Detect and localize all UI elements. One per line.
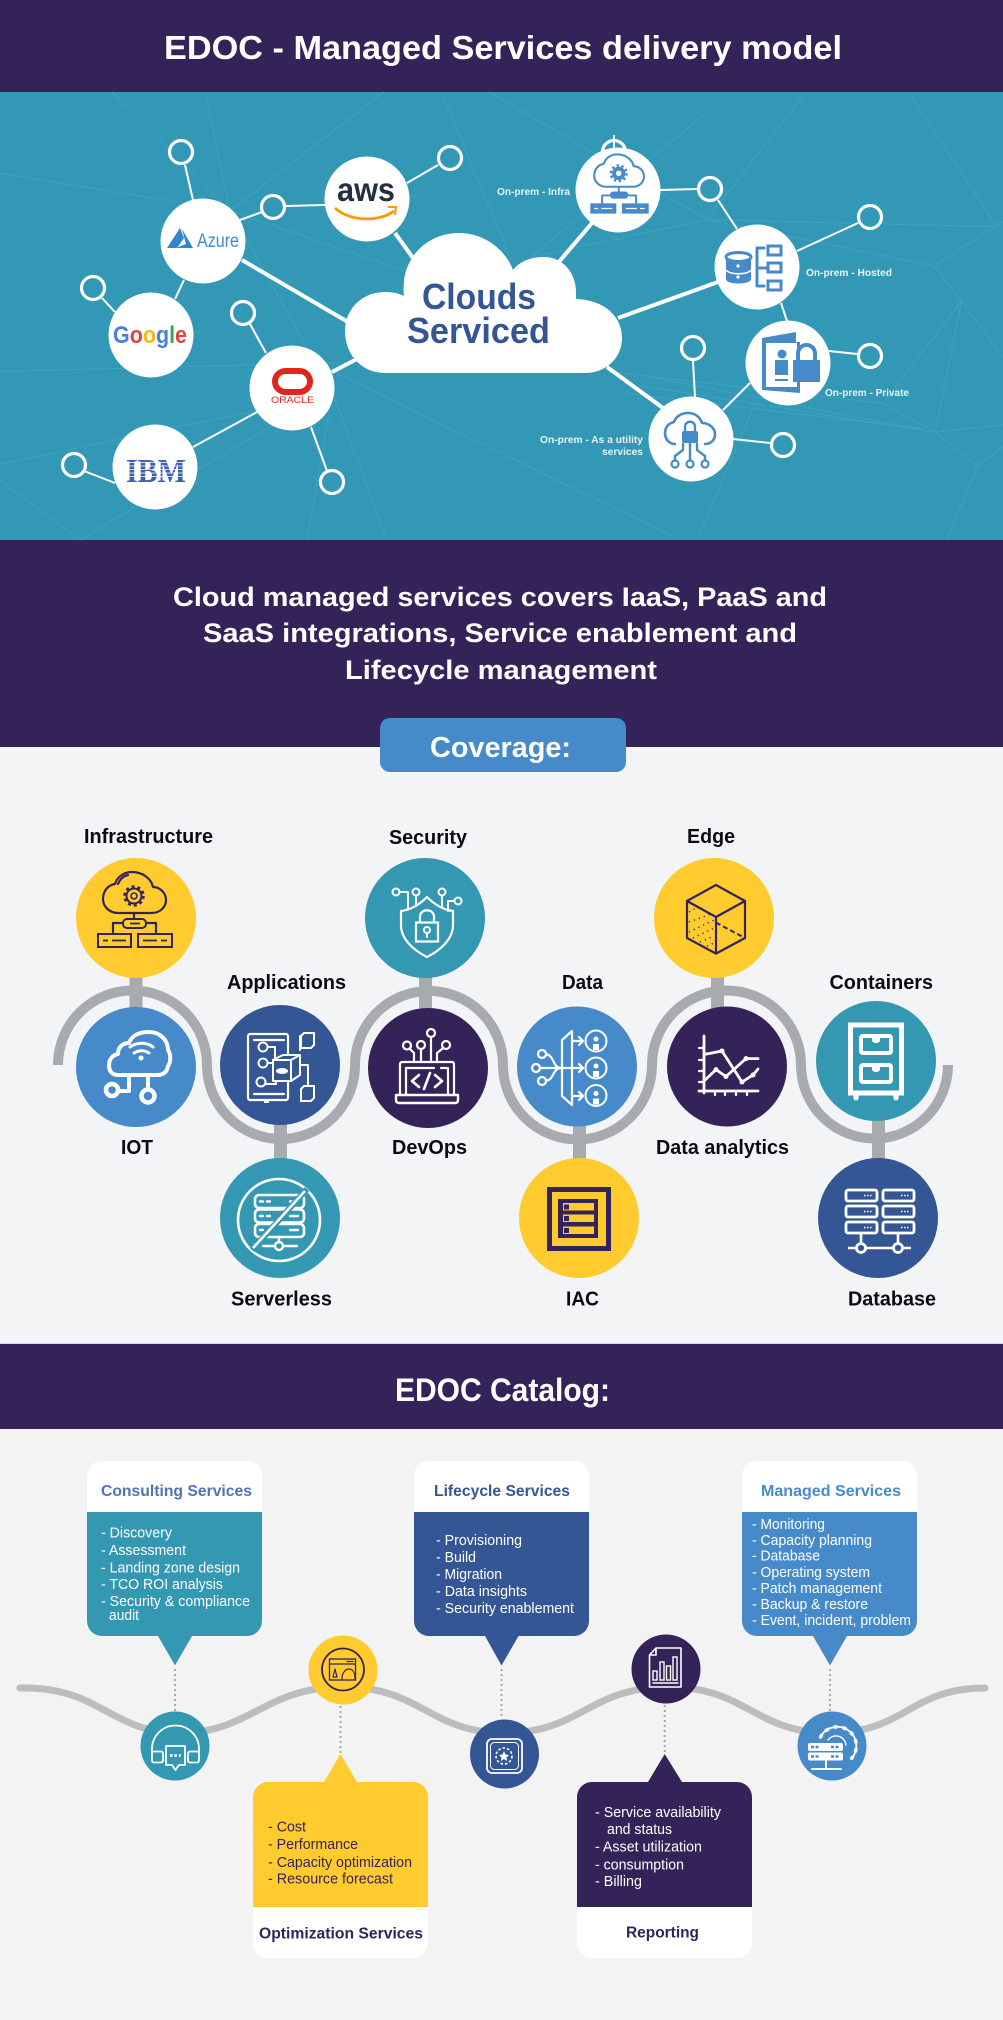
card: lifecycle services: - Provisioning [436, 1533, 522, 1549]
node: on-prem as a utility services [648, 396, 734, 482]
item: edge: Edge [687, 826, 735, 848]
item: data analytics: Data analytics [656, 1137, 789, 1159]
item: data analytics [656, 1006, 789, 1159]
intro text [173, 582, 827, 685]
marker: managed [798, 1669, 866, 1780]
title: EDOC - Managed Services delivery model [164, 29, 842, 66]
label: on-prem private: On-prem - Private [825, 387, 909, 399]
item: iac [519, 1158, 639, 1310]
item: database [818, 1158, 938, 1310]
item: devops [368, 1008, 488, 1159]
node: ibm [112, 424, 198, 510]
card: managed services: Managed Services [761, 1483, 901, 1500]
node: aws [324, 156, 410, 242]
card: reporting: - Service availability [595, 1805, 722, 1821]
marker: optimization [308, 1636, 378, 1753]
marker: lifecycle [470, 1669, 539, 1788]
node: google: Google [113, 322, 187, 349]
cloud: clouds serviced: Serviced [407, 310, 550, 351]
node: oracle: ORACLE [271, 395, 314, 405]
node: azure [160, 198, 246, 284]
cloud: clouds serviced [345, 233, 622, 373]
heading: edoc catalog: EDOC Catalog: [395, 1372, 610, 1408]
card: consulting services: - Assessment [101, 1543, 186, 1559]
intro text: SaaS integrations, Service enablement and [203, 618, 797, 648]
item: edge [654, 826, 774, 978]
card: reporting: - Asset utilization [595, 1840, 702, 1856]
item: data [517, 972, 637, 1126]
card: consulting services: - Discovery [101, 1526, 173, 1542]
card: reporting: Reporting [626, 1925, 699, 1942]
item: security [365, 827, 485, 978]
card: optimization services: Optimization Services [259, 1926, 423, 1943]
card: managed services: - Monitoring [752, 1517, 825, 1533]
label: on-prem hosted: On-prem - Hosted [806, 267, 892, 279]
card: optimization services [253, 1754, 428, 1958]
panel: catalog heading band [0, 1343, 1003, 1429]
card: lifecycle services: - Build [436, 1550, 476, 1566]
card: managed services [742, 1461, 917, 1666]
card: consulting services: - Security & compliance [101, 1594, 250, 1610]
item: database: Database [848, 1288, 936, 1310]
node: oracle [250, 346, 334, 430]
card: managed services: - Event, incident, problem [752, 1613, 911, 1629]
card: consulting services: Consulting Services [101, 1483, 252, 1500]
card: optimization services: - Capacity optimization [268, 1855, 412, 1871]
card: managed services: - Database [752, 1548, 820, 1564]
card: consulting services [87, 1461, 262, 1666]
item: infrastructure: Infrastructure [84, 826, 213, 848]
item: infrastructure [76, 826, 213, 978]
card: optimization services: - Cost [268, 1820, 306, 1836]
item: containers: Containers [830, 972, 933, 994]
item: iot [76, 1007, 196, 1159]
card: managed services: - Operating system [752, 1565, 870, 1581]
label: on-prem as a utility services: On-prem - As a utility [540, 434, 643, 446]
node: on-prem private [746, 320, 830, 406]
item: serverless [220, 1158, 340, 1310]
item: iot: IOT [121, 1137, 153, 1159]
item: devops: DevOps [392, 1137, 467, 1159]
title banner [0, 0, 1003, 92]
node: on-prem hosted [714, 224, 800, 310]
card: lifecycle services: - Migration [436, 1567, 502, 1583]
item: security: Security [389, 827, 468, 849]
marker: consulting [140, 1669, 210, 1780]
card: managed services: - Backup & restore [752, 1597, 868, 1613]
card: managed services: - Patch management [752, 1581, 882, 1597]
heading: coverage: Coverage: [430, 732, 571, 764]
node: aws: aws [337, 171, 395, 208]
card: managed services: - Capacity planning [752, 1533, 872, 1549]
card: reporting: and status [607, 1822, 672, 1838]
intro text: Lifecycle management [345, 655, 657, 685]
panel: coverage [0, 718, 1003, 1344]
node: on-prem infra [576, 148, 660, 232]
card: consulting services: - TCO ROI analysis [101, 1577, 223, 1593]
card: lifecycle services: - Security enablement [436, 1601, 574, 1617]
card: optimization services: - Performance [268, 1837, 358, 1853]
intro text: Cloud managed services covers IaaS, PaaS and [173, 582, 827, 612]
label: on-prem as a utility services [540, 434, 643, 458]
card: reporting: - consumption [595, 1857, 684, 1873]
item: serverless: Serverless [231, 1288, 332, 1310]
card: reporting: - Billing [595, 1874, 642, 1890]
node: ibm: IBM [126, 453, 186, 490]
card: lifecycle services: Lifecycle Services [434, 1483, 570, 1500]
item: containers [816, 972, 936, 1121]
card: consulting services: - Landing zone design [101, 1561, 240, 1577]
network node rings [62, 140, 882, 494]
node: google [108, 292, 194, 378]
label: on-prem as a utility services: services [602, 446, 643, 458]
heading: coverage [380, 718, 626, 772]
timeline wave [20, 1687, 985, 1733]
item: applications [220, 972, 346, 1125]
node: azure: Azure [197, 231, 239, 252]
card: lifecycle services: - Data insights [436, 1584, 527, 1600]
card: consulting services: audit [109, 1608, 139, 1624]
card: optimization services: - Resource forecast [268, 1872, 393, 1888]
panel: intro band [0, 540, 1003, 747]
card: lifecycle services [414, 1461, 589, 1666]
cloud: clouds serviced: Clouds [422, 276, 536, 317]
marker: reporting [632, 1634, 700, 1753]
card: reporting [577, 1754, 752, 1958]
label: on-prem infra: On-prem - Infra [497, 186, 570, 198]
panel: clouds serviced network [0, 92, 1003, 540]
wave track [58, 975, 948, 1160]
item: iac: IAC [566, 1288, 599, 1310]
network connectors [84, 135, 858, 483]
item: data: Data [562, 972, 604, 994]
item: applications: Applications [227, 972, 346, 994]
